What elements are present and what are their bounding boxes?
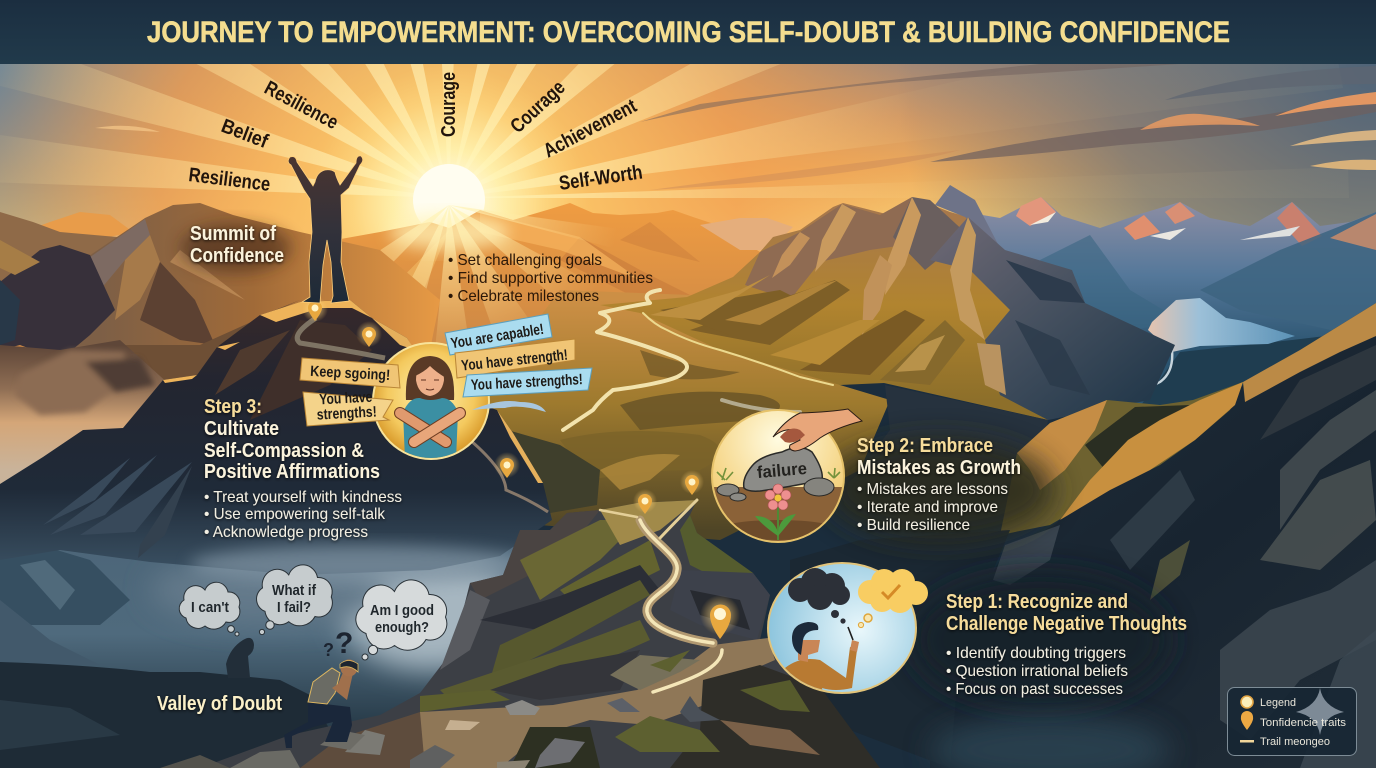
clouds <box>95 64 1376 190</box>
step 1 text: Step 1: Recognize and <box>946 591 1128 613</box>
bubble: I can't: I can't <box>191 599 229 616</box>
step 3 text: • Acknowledge progress <box>204 524 368 541</box>
thought bubbles <box>179 565 447 660</box>
step 3 text: Cultivate <box>204 418 279 440</box>
step 2 text <box>857 435 1021 534</box>
step 1 text: • Focus on past successes <box>946 681 1123 698</box>
banner: You have strength <box>455 339 575 378</box>
fog bank on left <box>0 340 170 485</box>
bubble: What if I fail <box>257 565 332 635</box>
title banner: JOURNEY TO EMPOWERMENT: OVERCOMING SELF-DOUBT & BUILDING CONFIDENCE <box>147 16 1230 49</box>
summit tips list: • Celebrate milestones <box>448 288 599 305</box>
banner: You have strengths left: strengths! <box>316 403 377 424</box>
step 1 text: • Question irrational beliefs <box>946 663 1128 680</box>
valley rivers <box>563 290 833 430</box>
banner: You have strengths right: You have strengths! <box>470 371 583 394</box>
dark thought cloud <box>788 568 850 624</box>
step 1 text: Challenge Negative Thoughts <box>946 613 1187 635</box>
pin: summit <box>302 296 328 322</box>
word: Self-Worth: Self-Worth <box>558 161 644 195</box>
blue mountain range <box>965 197 1376 420</box>
kneeling figure <box>284 660 358 748</box>
summit tips list: • Set challenging goals <box>448 252 602 269</box>
thin river <box>643 313 833 385</box>
bubble: I can't <box>179 582 240 636</box>
left distant mountains <box>0 203 440 400</box>
distant orange mountains <box>0 203 800 400</box>
golden thought cloud <box>858 569 928 628</box>
sun rays <box>0 0 1349 198</box>
icon: self-compassion medallion <box>372 342 490 460</box>
pin: ridge left <box>633 489 657 514</box>
dark shadow area below central mountain <box>790 438 1170 768</box>
silhouette doubting figure <box>226 638 254 678</box>
banner: Keep going <box>300 358 400 388</box>
golden central valley <box>470 290 890 540</box>
text shadow patch behind summit label <box>181 224 291 272</box>
label: Valley of Doubt: Valley of Doubt <box>157 693 282 715</box>
word: Resilience left: Resilience <box>187 164 271 196</box>
radiating words <box>187 72 644 196</box>
bubble: Am I good enough: enough? <box>375 619 429 636</box>
label: Summit of Confidence: Summit of <box>190 223 276 245</box>
step 3 text: • Use empowering self-talk <box>204 506 386 523</box>
pin: ridge right <box>680 470 704 495</box>
thick river <box>563 290 687 430</box>
step 2 text: • Build resilience <box>857 517 970 534</box>
banner: You have strengths left: You have <box>319 389 373 408</box>
affirmation banners <box>300 314 592 426</box>
pin: upper trail <box>356 321 382 347</box>
trail <box>600 500 722 692</box>
valley of doubt fog <box>0 520 560 768</box>
word: Belief: Belief <box>218 115 271 153</box>
icon: failure rock medallion <box>710 409 862 547</box>
question marks: ? <box>335 627 353 660</box>
step 2 text: Step 2: Embrace <box>857 435 993 457</box>
step 1 text <box>946 591 1187 698</box>
bubble: What if I fail: I fail? <box>277 599 311 616</box>
legend: circle marker: Legend <box>1260 697 1296 709</box>
lake and river <box>1105 298 1376 420</box>
sky background <box>0 64 1376 344</box>
step 3 text <box>204 396 402 541</box>
label: Summit of Confidence <box>190 223 284 267</box>
map pins <box>302 296 740 639</box>
pin: large start <box>700 595 740 639</box>
banner: Keep going: Keep sgoing! <box>310 363 391 384</box>
question marks: ? <box>323 640 334 660</box>
banner: You are capable: You are capable! <box>450 321 545 352</box>
step 3 text: Step 3: <box>204 396 262 418</box>
summit tips list <box>448 252 653 305</box>
title banner <box>0 0 1376 64</box>
central foreground ridge <box>200 500 880 768</box>
word: Courage angled: Courage <box>506 77 570 138</box>
icon: thought reframing medallion <box>767 562 928 700</box>
legend: pin marker: Tonfidencie traits <box>1260 717 1347 729</box>
banner: You have strength: You have strength! <box>460 346 569 375</box>
legend <box>1228 688 1356 756</box>
lower sun rays over mountains <box>350 205 640 350</box>
bubble: Am I good enough: Am I good <box>370 602 434 619</box>
step 3 text: Positive Affirmations <box>204 461 380 483</box>
central mountain <box>600 185 1175 530</box>
summit tips list: • Find supportive communities <box>448 270 653 287</box>
sun horizon glow <box>389 214 509 250</box>
banner: You have strengths right <box>463 368 592 397</box>
label: Summit of Confidence: Confidence <box>190 245 284 267</box>
legend: trail marker: Trail meongeo <box>1260 736 1330 748</box>
summit mountain <box>0 300 552 585</box>
summit person silhouette <box>288 156 363 303</box>
step 2 text: • Mistakes are lessons <box>857 481 1008 498</box>
bubble: Am I good enough <box>356 580 447 660</box>
pin: mid trail <box>494 452 520 478</box>
step 3 text: Self-Compassion & <box>204 440 364 462</box>
word: Achievement: Achievement <box>540 95 641 162</box>
bottom rocks <box>160 696 720 768</box>
sun <box>309 60 589 340</box>
icon: failure rock medallion: failure <box>756 459 808 482</box>
question marks <box>323 627 353 660</box>
small cloud wisp <box>472 401 546 412</box>
banner: You have strengths left <box>303 389 393 426</box>
right foreground mountain <box>930 303 1376 768</box>
step 1 text: • Identify doubting triggers <box>946 645 1126 662</box>
word: Courage vertical: Courage <box>438 72 460 137</box>
word: Resilience upper: Resilience <box>261 77 342 134</box>
step 3 text: • Treat yourself with kindness <box>204 489 402 506</box>
step 2 text: • Iterate and improve <box>857 499 998 516</box>
step 2 text: Mistakes as Growth <box>857 457 1021 479</box>
bubble: What if I fail: What if <box>272 582 317 599</box>
